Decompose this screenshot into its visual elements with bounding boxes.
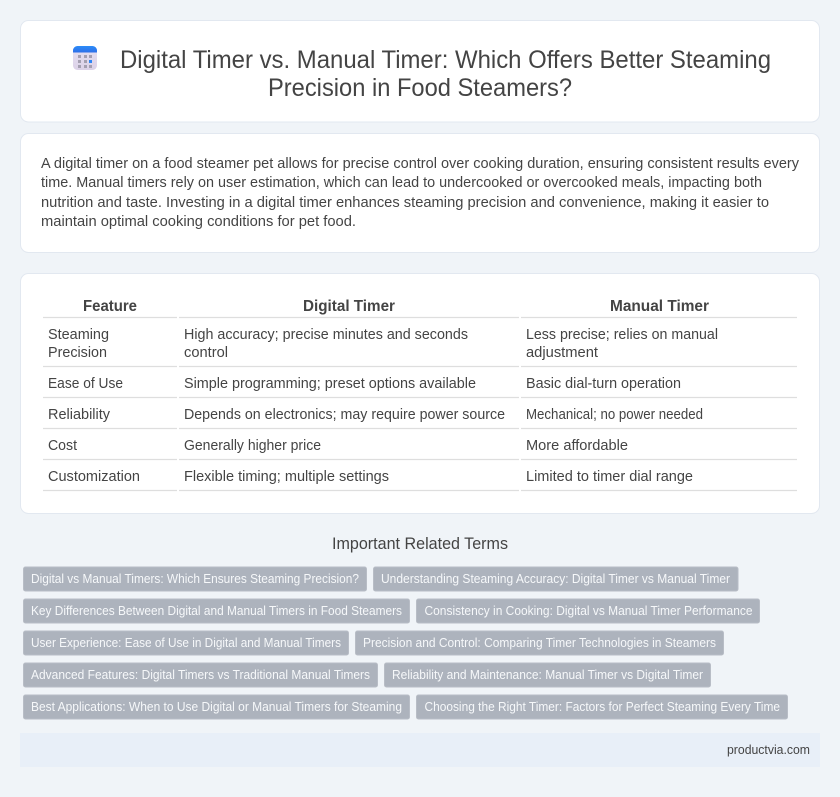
row: customization [48,469,693,485]
tag row 2: Consistency in Cooking: Digital vs Manual Timer Performance [424,604,753,618]
row: cost: More affordable [526,438,628,454]
row: customization: Limited to timer dial range [526,469,693,485]
text block: introduction paragraph: nutrition and taste. Investing in a digital timer enhances steaming precision and convenience, making it easier to [41,194,769,211]
row: ease of use: Simple programming; preset options available [184,376,476,392]
title: Digital Timer vs. Manual Timer: Which Offers Better Steaming [120,46,771,74]
panel: comparison table [20,274,820,514]
row: cost: Generally higher price [184,438,321,454]
table header: Digital Timer [303,298,395,315]
tag row 1: Understanding Steaming Accuracy: Digital Timer vs Manual Timer [381,572,730,586]
row: steaming precision: High accuracy; precise minutes and seconds [184,327,468,343]
footer: productvia.com [727,742,810,757]
tag row 2: Key Differences Between Digital and Manual Timers in Food Steamers [31,604,402,618]
row: steaming precision: Steaming [48,327,109,343]
icon: calendar timer [73,46,97,70]
tag row 3: User Experience: Ease of Use in Digital and Manual Timers [31,636,341,650]
row: steaming precision: adjustment [526,345,598,361]
title [120,46,771,102]
tag row 3: Precision and Control: Comparing Timer Technologies in Steamers [363,636,716,650]
tag row 5: Best Applications: When to Use Digital or Manual Timers for Steaming [31,700,402,714]
tag row 3 [24,631,724,655]
text block: introduction paragraph: time. Manual timers rely on user estimation, which can lead to undercooked or overcooked meals, impacting both [41,174,762,191]
panel: introduction [20,134,820,252]
tag row 1 [24,567,738,591]
table header [83,298,709,315]
text block: introduction paragraph [41,155,799,230]
row: reliability: Reliability [48,407,111,423]
text block: introduction paragraph: maintain optimal cooking conditions for pet food. [41,213,356,230]
tag row 4: Reliability and Maintenance: Manual Timer vs Digital Timer [392,668,703,682]
row: steaming precision: Precision [48,345,107,361]
row: customization: Flexible timing; multiple settings [184,469,389,485]
row: ease of use: Ease of Use [48,376,123,392]
table header: Manual Timer [610,298,709,315]
row: cost: Cost [48,438,77,454]
row: ease of use [48,376,681,392]
row: customization: Customization [48,469,140,485]
title: Precision in Food Steamers? [268,74,572,102]
table header: Feature [83,298,137,315]
tag row 4: Advanced Features: Digital Timers vs Traditional Manual Timers [31,668,370,682]
tag row 5: Choosing the Right Timer: Factors for Perfect Steaming Every Time [424,700,780,714]
tag row 2 [24,599,760,623]
row: reliability: Depends on electronics; may require power source [184,407,505,423]
heading: important related terms: Important Related Terms [332,535,508,553]
tag row 1: Digital vs Manual Timers: Which Ensures Steaming Precision? [31,572,359,586]
row: reliability: Mechanical; no power needed [526,407,703,423]
row: reliability [48,407,703,423]
row: ease of use: Basic dial-turn operation [526,376,681,392]
text block: introduction paragraph: A digital timer on a food steamer pet allows for precise control over cooking duration, ensuring consistent results every [41,155,799,172]
header panel [20,20,820,122]
row: steaming precision: Less precise; relies on manual [526,327,718,343]
row: steaming precision [48,327,718,361]
tag row 5 [24,695,788,719]
footer [20,733,820,767]
row: steaming precision: control [184,345,228,361]
tag row 4 [24,663,710,687]
row: cost [48,438,628,454]
related term tags [24,567,788,719]
